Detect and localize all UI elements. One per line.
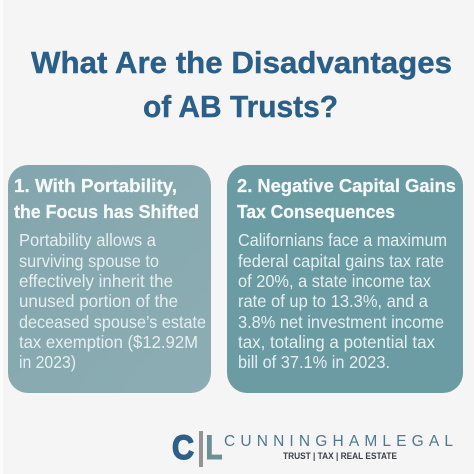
panel body: capital gains: 3.8% net investment income [238,312,444,332]
panel: with portability [8,165,211,393]
panel body: capital gains: bill of 37.1% in 2023. [238,352,390,372]
panel body: capital gains: rate of up to 13.3%, and a [238,291,428,311]
panel heading: capital gains [237,175,456,222]
logo tagline: TRUST | TAX | REAL ESTATE [283,451,397,461]
panel heading: with portability: 1. With Portability, [14,175,177,196]
title: What Are the Disadvantages [31,46,452,80]
panel body: with portability: tax exemption ($12.92M [19,332,198,352]
panel body: with portability: unused portion of the [19,291,178,311]
panel heading: with portability: the Focus has Shifted [14,201,199,222]
panel heading: with portability [14,175,199,222]
logo: Cunningham Legal [172,429,453,467]
panel body: capital gains: federal capital gains tax rate [238,251,444,271]
panel body: capital gains: tax, totaling a potential tax [238,332,435,352]
panel body: with portability: Portability allows a [19,230,156,250]
panel body: capital gains: of 20%, a state income tax [238,271,431,291]
panel heading: capital gains: Tax Consequences [237,201,395,222]
panel body: with portability: surviving spouse to [19,251,159,271]
panel body: with portability [19,230,206,372]
panel body: with portability: in 2023) [19,352,76,372]
logo mark: C|L: C [172,429,194,467]
title: of AB Trusts? [143,90,338,124]
panel body: with portability: effectively inherit the [19,271,173,291]
panel body: capital gains [238,230,447,372]
logo wordmark: CUNNINGHAMLEGAL [224,433,453,450]
panel body: with portability: deceased spouse’s estate [19,312,206,332]
panel: capital gains [227,165,463,393]
panel heading: capital gains: 2. Negative Capital Gains [237,175,456,196]
panel body: capital gains: Californians face a maximum [238,230,447,250]
logo mark: C|L: L [206,429,222,467]
title [31,46,452,124]
logo mark: C|L [172,429,222,467]
